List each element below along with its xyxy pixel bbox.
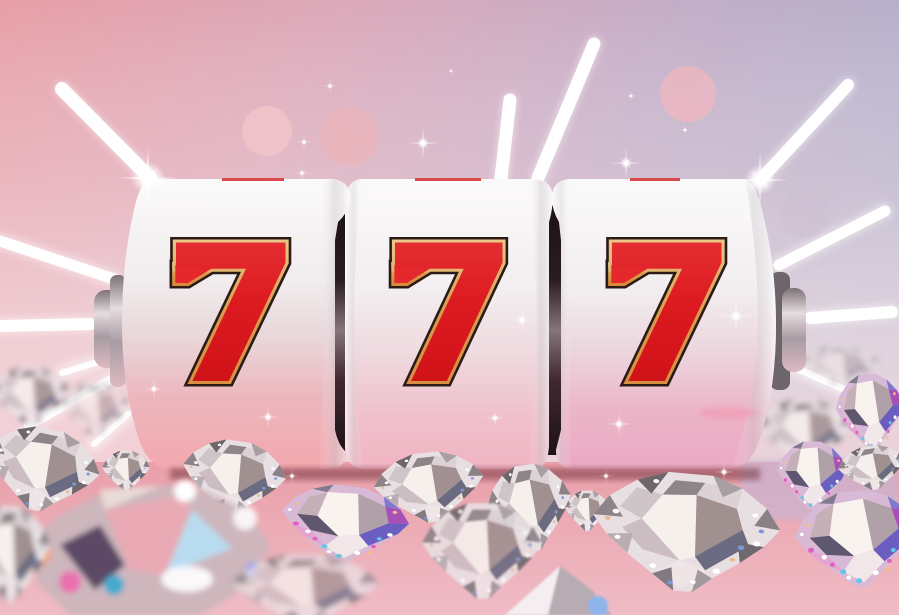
diamond: standing centre (483, 459, 578, 557)
reel 3 (552, 178, 776, 469)
diamond: large blurred foreground (25, 480, 270, 615)
digit 7 reel 3: 7 (599, 204, 737, 426)
diamond: coloured front left (277, 479, 412, 568)
digit 7 reel 3: 7 (599, 204, 737, 426)
digit 7 reel 3: 7 (599, 204, 737, 426)
diamond: blurred left edge (0, 506, 50, 602)
diamond: blurred bottom (505, 566, 612, 615)
diamond: centre (371, 447, 488, 528)
right axle (770, 272, 806, 390)
floor surface (0, 460, 899, 615)
ray cores (0, 44, 892, 444)
background diamonds blurred (0, 346, 880, 464)
diamond: coloured right edge (791, 485, 899, 593)
diamond: blurred centre (422, 503, 542, 599)
dark gaps between reels (332, 205, 564, 455)
diamond: upper centre left (177, 434, 290, 521)
ray glow (0, 44, 892, 444)
diamond: small left (102, 451, 150, 491)
digit 7 reel 1: 7 (163, 204, 301, 426)
diamond: small centre right (565, 491, 609, 531)
diamond: top right (833, 371, 899, 454)
diamond: violet upright (777, 441, 847, 510)
bokeh circles (242, 29, 831, 239)
left axle (94, 275, 126, 387)
shadow under reels (170, 468, 760, 480)
digit 7 reel 1: 7 (163, 204, 301, 426)
reel 1 (122, 178, 350, 469)
digit 7 reel 2: 7 (382, 206, 518, 426)
diamond: large front right (587, 466, 785, 599)
reel 2 (345, 178, 553, 469)
diamond: blurred bottom centre left (231, 555, 379, 615)
digit 7 reel 2: 7 (382, 206, 518, 426)
diamond: far left (0, 417, 107, 522)
sparkles (118, 66, 788, 484)
digit 7 reel 1: 7 (163, 204, 301, 426)
diamond: right middle (835, 441, 899, 495)
glowing light rays (0, 44, 892, 444)
digit 7 reel 2: 7 (382, 206, 518, 426)
